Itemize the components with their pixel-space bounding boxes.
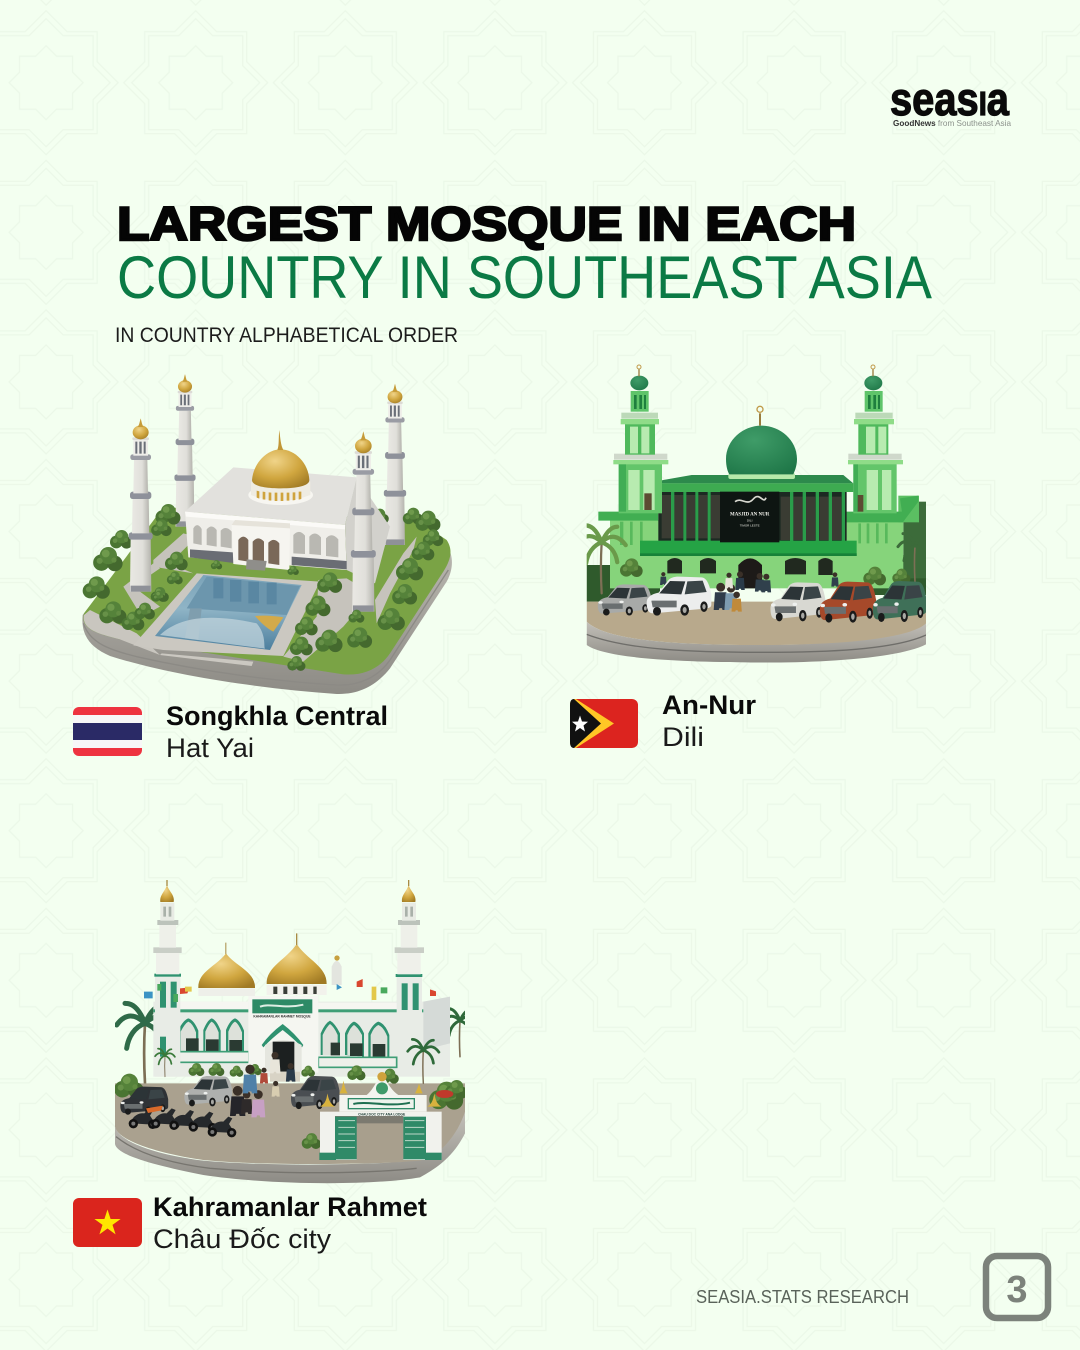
festive flags [144,979,436,1002]
footer credit: SEASIA.STATS RESEARCH [696,1287,909,1307]
sign board: TIMOR LESTE [740,523,760,527]
parked cars and motorbikes [120,1076,339,1137]
people [230,1052,295,1117]
people [660,571,839,612]
minaret left [153,880,182,1077]
green main building [598,475,919,588]
main hall [185,467,390,583]
flag: Thailand [73,707,142,756]
left minaret [613,365,668,513]
entrance gate [319,1072,442,1160]
trees and shrubs [114,1039,468,1149]
illustration: An-Nur mosque [578,365,932,663]
label: Songkhla Central, Hat Yai [166,701,388,763]
logo: seasia: GoodNews from Southeast Asia [893,118,1011,128]
label: Kahramanlar Rahmet, Châu Đốc city [153,1192,427,1254]
label: Kahramanlar Rahmet, Châu Đốc city: Kahramanlar Rahmet [153,1192,427,1222]
flag: Vietnam [73,1198,142,1247]
label: An-Nur, Dili [662,690,757,752]
label: Songkhla Central, Hat Yai: Hat Yai [166,733,254,763]
parked cars [598,577,926,623]
sign board: DILI [747,519,753,523]
minaret right [394,880,424,1012]
white building [153,996,450,1082]
title: COUNTRY IN SOUTHEAST ASIA [117,244,932,311]
title [117,198,932,311]
sign board [720,492,779,542]
golden dome [248,430,313,505]
logo: seasia: seasIa [890,73,1009,125]
label: An-Nur, Dili: Dili [662,722,704,752]
page number badge [986,1256,1048,1318]
illustration: Kahramanlar Rahmet mosque [114,880,477,1183]
title: LARGEST MOSQUE IN EACH [117,198,856,251]
entrance gate: CHAU DOC CITY ANA LODGE [358,1113,406,1117]
sign board: MASJID AN NUR [730,513,770,518]
right minaret [848,365,903,513]
golden domes [198,933,342,996]
page number badge: 3 [1006,1269,1028,1311]
illustration: Songkhla Central mosque [82,374,452,694]
flag: Timor-Leste [570,699,638,748]
green dome [726,406,797,479]
white building: KAHRAMANLAR RAHMET MOSQUE [253,1015,311,1019]
subtitle: IN COUNTRY ALPHABETICAL ORDER [115,323,458,347]
label: Kahramanlar Rahmet, Châu Đốc city: Châu Đốc city [153,1224,332,1254]
label: An-Nur, Dili: An-Nur [662,690,757,720]
palm tree [578,525,626,593]
label: Songkhla Central, Hat Yai: Songkhla Central [166,701,388,731]
